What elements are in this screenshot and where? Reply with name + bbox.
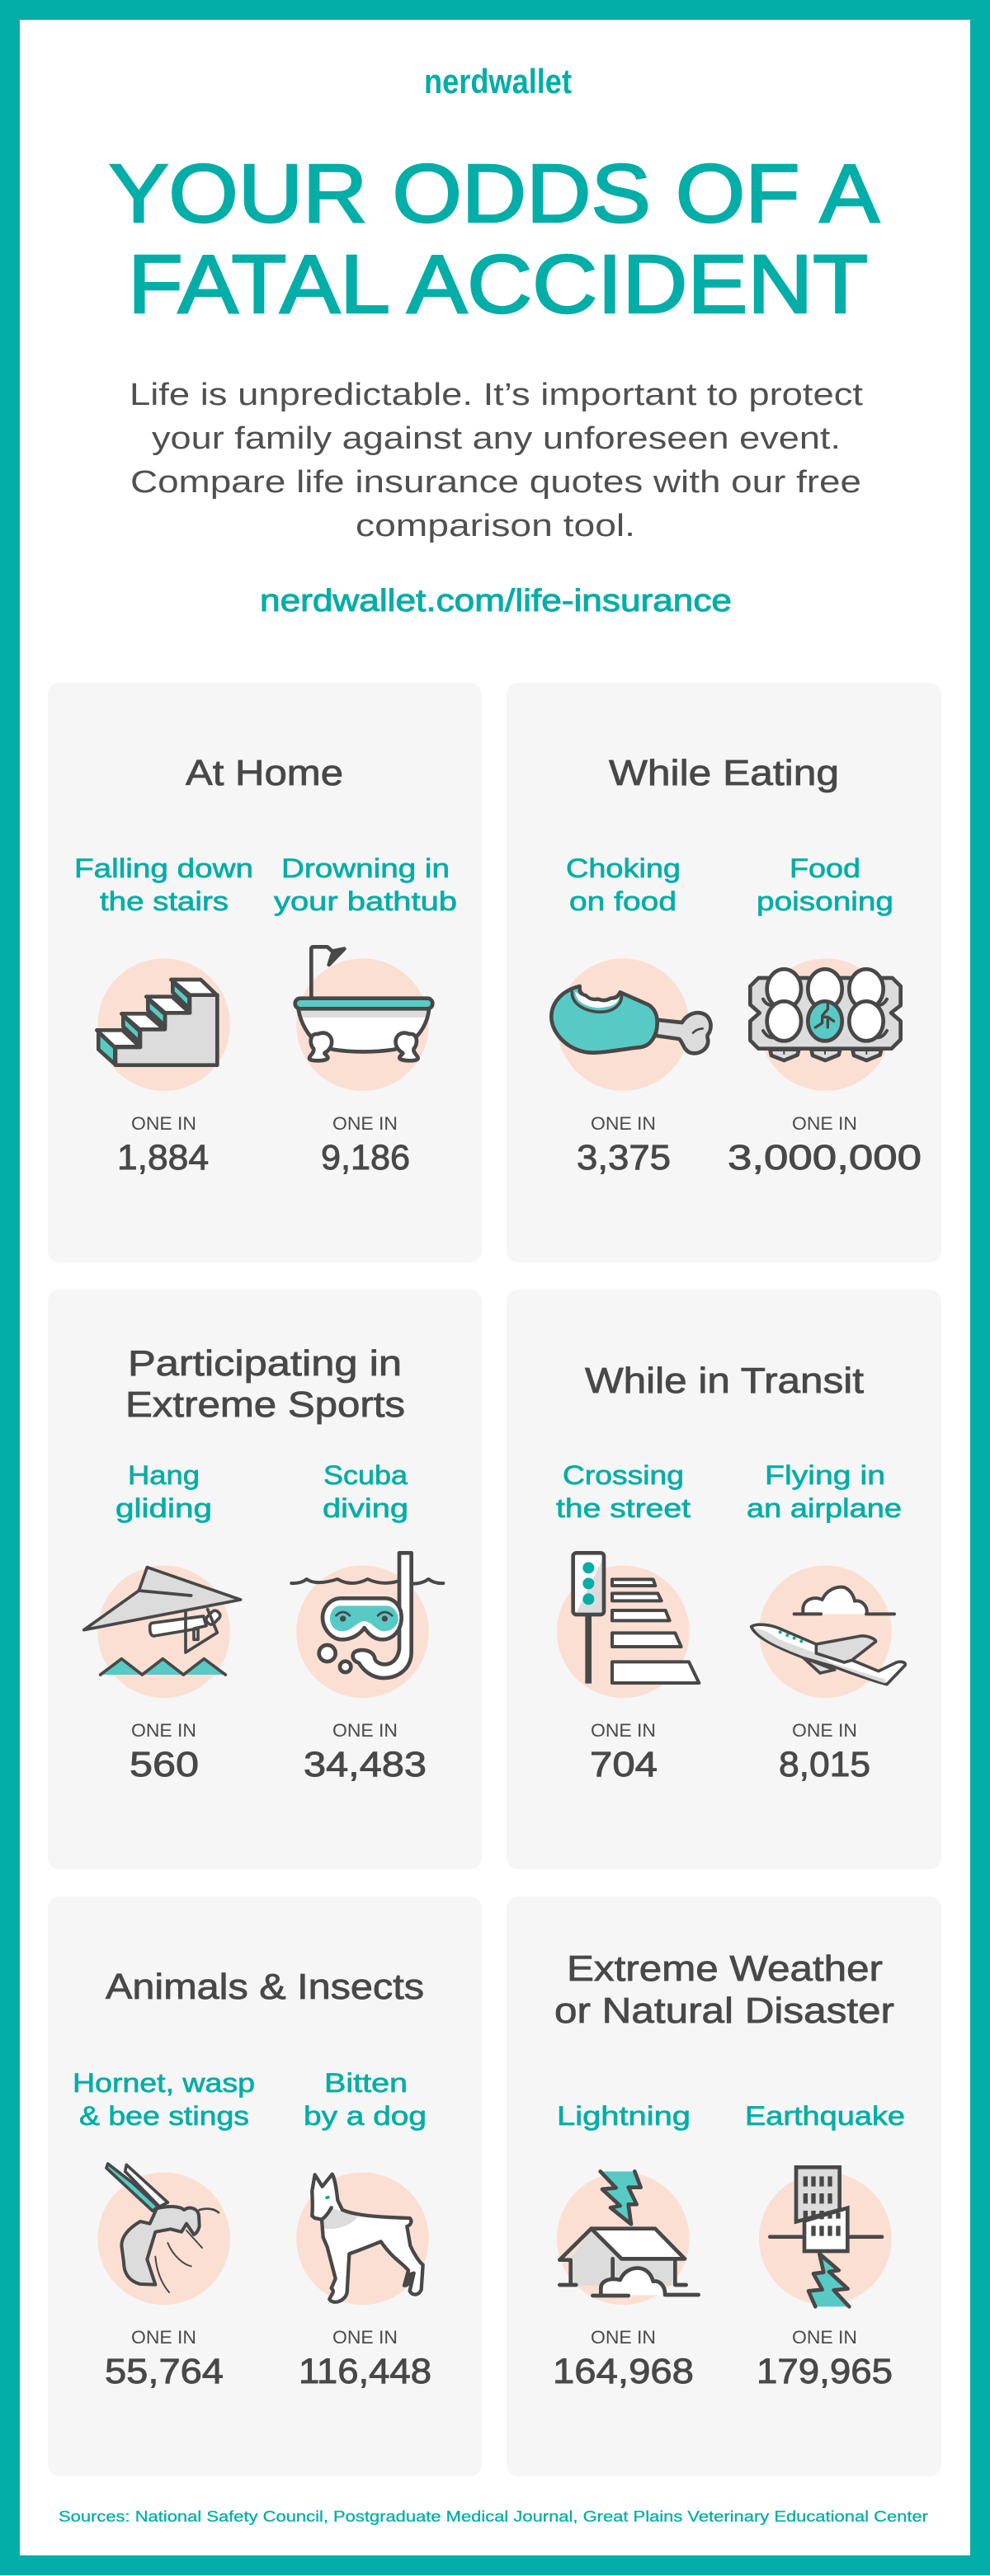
odds: one in 179,965: ONE IN	[792, 2327, 857, 2348]
title: YOUR ODDS OF A	[109, 148, 879, 240]
heading: at home: At Home	[186, 753, 343, 793]
odds: one in 1,884: ONE IN	[131, 1113, 196, 1134]
odds: one in 164,968: 164,968	[553, 2352, 694, 2391]
odds: one in 9,186: 9,186	[321, 1138, 410, 1178]
icon: chicken drumstick	[551, 958, 711, 1091]
heading: extreme weather or natural disaster	[554, 1948, 894, 2031]
label: food poisoning: poisoning	[757, 886, 893, 916]
label: bitten by a dog: Bitten	[324, 2068, 408, 2098]
label: lightning: Lightning	[557, 2101, 691, 2131]
odds: one in 34,483: ONE IN	[332, 1720, 398, 1741]
icon: stairs	[97, 958, 230, 1091]
panel: while eating	[507, 683, 941, 1262]
label: falling down the stairs: Falling down	[74, 853, 253, 883]
icon: lightning and house	[557, 2171, 699, 2305]
label: drowning in your bathtub: your bathtub	[274, 886, 457, 916]
label: drowning in your bathtub	[274, 853, 457, 916]
intro paragraph: your family against any unforeseen event.	[152, 421, 841, 456]
panel: extreme weather or natural disaster	[507, 1897, 941, 2476]
heading: animals and insects: Animals & Insects	[106, 1967, 424, 2007]
odds: one in 9,186: ONE IN	[332, 1113, 398, 1134]
heading: extreme weather or natural disaster: Extreme Weather	[567, 1948, 883, 1989]
odds: one in 9,186	[321, 1113, 410, 1178]
label: crossing the street: the street	[556, 1493, 691, 1523]
odds: one in 179,965: 179,965	[757, 2352, 893, 2391]
odds: one in 164,968: ONE IN	[591, 2327, 656, 2348]
icon: egg carton	[750, 958, 901, 1091]
panel: animals and insects	[48, 1897, 482, 2476]
odds: one in 179,965	[757, 2327, 893, 2391]
odds: one in 55,764	[105, 2327, 224, 2391]
label: hang gliding: gliding	[116, 1493, 212, 1523]
label: scuba diving: diving	[323, 1493, 408, 1523]
label: choking on food	[566, 853, 681, 916]
heading: while in transit: While in Transit	[585, 1361, 864, 1401]
odds: one in 560: ONE IN	[131, 1720, 196, 1741]
panel: extreme sports	[48, 1290, 482, 1869]
icon: scuba mask and snorkel	[291, 1553, 443, 1698]
icon: traffic light and crosswalk	[557, 1553, 699, 1698]
icon: wasp	[97, 2164, 230, 2305]
odds: one in 55,764: ONE IN	[131, 2327, 196, 2348]
label: hornet, wasp and bee stings: Hornet, wasp	[73, 2068, 255, 2098]
odds: one in 3,375	[577, 1113, 671, 1178]
heading: participating in extreme sports: Participating in	[128, 1343, 402, 1384]
label: scuba diving: Scuba	[323, 1460, 408, 1490]
label: flying in an airplane: an airplane	[747, 1493, 902, 1523]
label: food poisoning	[757, 853, 893, 916]
odds: one in 704: ONE IN	[591, 1720, 656, 1741]
label: falling down the stairs	[74, 853, 253, 916]
icon: bathtub	[295, 947, 432, 1091]
odds: one in 3,375: 3,375	[577, 1138, 671, 1178]
heading: participating in extreme sports	[125, 1343, 405, 1425]
label: food poisoning: Food	[790, 853, 860, 883]
odds: one in 116,448: ONE IN	[332, 2327, 398, 2348]
link: comparison tool URL: nerdwallet.com/life-insurance	[260, 584, 732, 618]
odds: one in 560	[130, 1720, 199, 1784]
label: crossing the street	[556, 1460, 691, 1523]
label: flying in an airplane	[747, 1460, 902, 1523]
label: hang gliding: Hang	[128, 1460, 200, 1490]
label: hornet, wasp and bee stings	[73, 2068, 255, 2131]
odds: one in 34,483	[304, 1720, 427, 1784]
label: drowning in your bathtub: Drowning in	[281, 853, 450, 883]
odds: one in 55,764: 55,764	[105, 2352, 224, 2391]
icon: hang glider	[84, 1565, 241, 1698]
title	[109, 148, 879, 331]
odds: one in 34,483: 34,483	[304, 1745, 427, 1784]
logo: nerdwallet: nerdwallet	[424, 62, 572, 101]
odds: one in 704: 704	[590, 1745, 658, 1784]
odds: one in 704	[590, 1720, 658, 1784]
odds: one in 3,000,000: 3,000,000	[728, 1138, 922, 1178]
label: bitten by a dog: by a dog	[304, 2101, 427, 2131]
heading: extreme weather or natural disaster: or Natural Disaster	[554, 1991, 894, 2031]
odds: one in 116,448	[299, 2327, 431, 2391]
intro paragraph: Compare life insurance quotes with our free	[130, 465, 861, 500]
heading: while eating: While Eating	[609, 753, 839, 793]
odds: one in 8,015: 8,015	[779, 1745, 870, 1784]
intro paragraph: comparison tool.	[356, 509, 635, 543]
odds: one in 3,000,000	[728, 1113, 922, 1178]
icon: dog	[296, 2172, 429, 2305]
odds: one in 8,015	[779, 1720, 870, 1784]
odds: one in 1,884: 1,884	[117, 1138, 209, 1178]
label: hornet, wasp and bee stings: & bee stings	[79, 2101, 249, 2131]
odds: one in 164,968	[553, 2327, 694, 2391]
title: FATAL ACCIDENT	[128, 238, 868, 331]
intro paragraph: Life is unpredictable. It’s important to protect	[130, 378, 864, 412]
odds: one in 560: 560	[130, 1745, 199, 1784]
odds: one in 8,015: ONE IN	[792, 1720, 857, 1741]
icon: airplane and cloud	[752, 1565, 905, 1698]
label: flying in an airplane: Flying in	[765, 1460, 885, 1490]
label: falling down the stairs: the stairs	[100, 886, 229, 916]
label: crossing the street: Crossing	[563, 1460, 684, 1490]
odds: one in 116,448: 116,448	[299, 2352, 431, 2391]
odds: one in 1,884	[117, 1113, 209, 1178]
label: choking on food: Choking	[566, 853, 681, 883]
odds: one in 3,000,000: ONE IN	[792, 1113, 857, 1134]
label: choking on food: on food	[569, 886, 676, 916]
panel: at home	[48, 683, 482, 1262]
intro paragraph	[130, 378, 864, 543]
panel: while in transit	[507, 1290, 941, 1869]
icon: earthquake with split building	[759, 2167, 892, 2306]
label: earthquake: Earthquake	[745, 2101, 905, 2131]
heading: participating in extreme sports: Extreme Sports	[125, 1384, 405, 1425]
label: hang gliding	[116, 1460, 212, 1523]
sources footnote: Sources: National Safety Council, Postgraduate Medical Journal, Great Plains Veterinary Educational Center	[59, 2508, 928, 2525]
label: scuba diving	[323, 1460, 408, 1523]
odds: one in 3,375: ONE IN	[591, 1113, 656, 1134]
label: bitten by a dog	[304, 2068, 427, 2131]
